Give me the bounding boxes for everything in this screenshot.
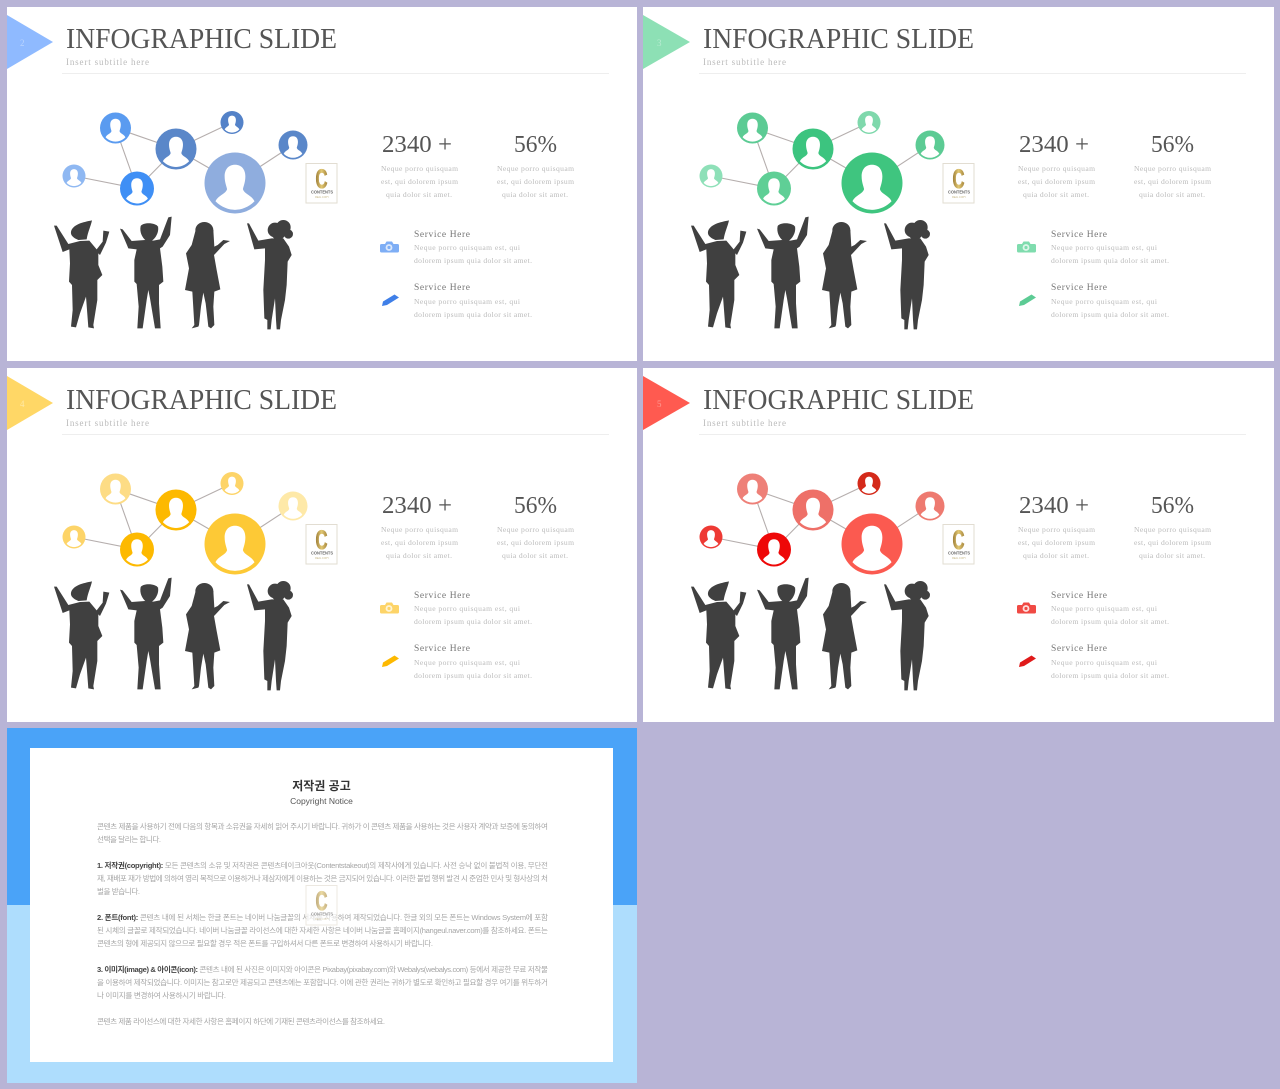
stat: 56%: est, qui dolorem ipsum <box>497 538 574 547</box>
stat: 2340 +: quia dolor sit amet. <box>1023 551 1089 560</box>
icon: camera <box>1017 602 1036 614</box>
panel: green slide <box>643 7 1274 361</box>
stat: 2340 +: Neque porro quisquam <box>381 525 458 534</box>
service block 1: Neque porro quisquam est, qui <box>1051 604 1157 613</box>
copyright intro text: 선택을 달리는 합니다. <box>97 834 161 844</box>
logo badge <box>306 524 337 564</box>
icon: yellow number triangle <box>7 376 53 430</box>
stat: 2340 +: est, qui dolorem ipsum <box>1018 538 1095 547</box>
icon: pencil <box>382 294 399 306</box>
subtitle: Insert subtitle here <box>66 57 149 67</box>
stat: 2340 +: est, qui dolorem ipsum <box>1018 177 1095 186</box>
icon: yellow number triangle: 4 <box>20 399 25 409</box>
stat: 56%: 56% <box>1151 132 1194 158</box>
stat: 56%: 56% <box>514 493 557 519</box>
stat: 2340 +: 2340 + <box>1019 493 1089 519</box>
service block 1: Service Here <box>1051 230 1107 240</box>
logo badge <box>943 524 974 564</box>
people silhouettes <box>691 217 930 329</box>
section 1: copyright: 재, 재배포 재가 방법에 의하여 영리 목적으로 이용하거나 제삼자에게 이용하는 것은 금지되어 있습니다. 이러한 불법 행위 발견 시 준엄한 민사 및 형사상의 처 <box>97 873 548 883</box>
stat: 56%: Neque porro quisquam <box>1134 525 1211 534</box>
icon: green number triangle <box>643 15 690 69</box>
service block 1: dolorem ipsum quia dolor sit amet. <box>414 617 532 626</box>
service block 2: dolorem ipsum quia dolor sit amet. <box>414 671 532 680</box>
stat: 2340 +: Neque porro quisquam <box>1018 525 1095 534</box>
panel: blue slide <box>7 7 637 361</box>
title: INFOGRAPHIC SLIDE <box>703 24 974 55</box>
title: INFOGRAPHIC SLIDE <box>66 385 337 416</box>
panel: red slide <box>643 368 1274 722</box>
stat: 2340 +: Neque porro quisquam <box>381 164 458 173</box>
network of user avatars <box>62 472 308 574</box>
icon: blue number triangle <box>7 15 53 69</box>
stat: 56%: quia dolor sit amet. <box>502 190 568 199</box>
icon: red number triangle <box>643 376 690 430</box>
service block 2: dolorem ipsum quia dolor sit amet. <box>1051 310 1169 319</box>
service block 1 <box>1051 591 1169 626</box>
section 3: image and icon <box>97 964 548 1000</box>
stat: 56%: quia dolor sit amet. <box>502 551 568 560</box>
section 3: image and icon: 나 이미지를 변경하여 사용하시기 바랍니다. <box>97 990 226 1000</box>
service block 1: Neque porro quisquam est, qui <box>1051 243 1157 252</box>
subtitle: Insert subtitle here <box>703 418 786 428</box>
service block 2: Service Here <box>414 283 470 293</box>
stat: 2340 + <box>1018 132 1095 199</box>
stat: 2340 +: Neque porro quisquam <box>1018 164 1095 173</box>
stat: 2340 +: est, qui dolorem ipsum <box>381 538 458 547</box>
service block 1: dolorem ipsum quia dolor sit amet. <box>1051 256 1169 265</box>
title: INFOGRAPHIC SLIDE <box>703 385 974 416</box>
stat: 2340 +: est, qui dolorem ipsum <box>381 177 458 186</box>
network of user avatars <box>62 111 308 214</box>
icon: red number triangle: 5 <box>657 399 662 409</box>
service block 1 <box>414 591 532 626</box>
panel: yellow slide <box>7 368 637 722</box>
icon: pencil <box>382 656 399 667</box>
stat: 56%: 56% <box>1151 493 1194 519</box>
people silhouettes <box>691 578 930 690</box>
logo badge <box>306 886 337 925</box>
service block 1: dolorem ipsum quia dolor sit amet. <box>1051 617 1169 626</box>
panel: copyright notice <box>7 728 637 1083</box>
network of user avatars <box>700 111 944 214</box>
logo badge <box>306 164 337 203</box>
subtitle: Insert subtitle here <box>703 57 786 67</box>
stat: 56% <box>497 132 574 199</box>
stat: 2340 + <box>381 132 458 199</box>
copyright heading: Copyright Notice <box>290 796 353 806</box>
stat: 2340 +: quia dolor sit amet. <box>1023 190 1089 199</box>
section 3: image and icon: 을 이용하여 제작되었습니다. 이미지는 참고로만 제공되고 콘텐츠에는 포함합니다. 이에 관한 권리는 귀하가 별도로 확인하고 필요할 경우 여기를 위두하거 <box>97 977 548 987</box>
copyright intro text: 콘텐츠 제품을 사용하기 전에 다음의 항목과 소유권을 자세히 읽어 주시기 바랍니다. 귀하가 이 콘텐츠 제품을 사용하는 것은 사용자 계약과 보증에 동의하여 <box>97 821 548 831</box>
network of user avatars <box>700 472 944 574</box>
stat: 56%: 56% <box>514 132 557 158</box>
section 1: copyright: 1. 저작권(copyright): 모든 콘텐츠의 소유 및 저작권은 콘텐츠테이크아웃(Contentstakeout)의 제작사에게 있습니다. 사전 승낙 없이 불법적 이용, 무단전 <box>97 860 548 870</box>
icon: pencil <box>1019 656 1036 667</box>
section 2: font: 2. 폰트(font): 콘텐츠 내에 된 서체는 한글 폰트는 네이버 나눔글꼴의 서체를 사용하여 제작되었습니다. 한글 외의 모든 폰트는 Windows System에 포함 <box>97 912 548 922</box>
service block 2: Service Here <box>1051 644 1107 654</box>
service block 2: Service Here <box>1051 283 1107 293</box>
copyright heading <box>290 778 353 806</box>
stat: 56%: est, qui dolorem ipsum <box>1134 177 1211 186</box>
service block 2: Neque porro quisquam est, qui <box>1051 658 1157 667</box>
section 1: copyright <box>97 860 548 896</box>
stat: 56%: Neque porro quisquam <box>497 164 574 173</box>
icon: camera <box>380 602 399 614</box>
stat: 56%: Neque porro quisquam <box>1134 164 1211 173</box>
service block 1: Service Here <box>414 591 470 601</box>
closing note: 콘텐츠 제품 라이선스에 대한 자세한 사항은 홈페이지 하단에 기재된 콘텐츠라이선스를 참조하세요. <box>97 1016 385 1026</box>
service block 2: dolorem ipsum quia dolor sit amet. <box>1051 671 1169 680</box>
section 1: copyright: 벌을 받습니다. <box>97 886 140 896</box>
logo badge <box>943 164 974 203</box>
stat: 56% <box>1134 493 1211 560</box>
stat: 56%: Neque porro quisquam <box>497 525 574 534</box>
stat: 2340 + <box>1018 493 1095 560</box>
people silhouettes <box>54 578 293 690</box>
stat: 2340 +: quia dolor sit amet. <box>386 551 452 560</box>
service block 2: Neque porro quisquam est, qui <box>414 297 520 306</box>
icon: pencil <box>1019 294 1036 306</box>
service block 1 <box>1051 230 1169 265</box>
service block 1: Neque porro quisquam est, qui <box>414 604 520 613</box>
subtitle: Insert subtitle here <box>66 418 149 428</box>
icon: green number triangle: 3 <box>657 38 662 48</box>
people silhouettes <box>54 217 293 329</box>
section 2: font: 콘텐츠의 형에 제공되지 않으므로 필요할 경우 적은 폰트를 구입하셔서 다른 폰트로 변경하여 사용하시기 바랍니다. <box>97 938 433 948</box>
stat: 56%: quia dolor sit amet. <box>1139 190 1205 199</box>
stat: 2340 +: quia dolor sit amet. <box>386 190 452 199</box>
service block 1: Service Here <box>414 230 470 240</box>
stat: 2340 +: 2340 + <box>382 493 452 519</box>
stat: 2340 +: 2340 + <box>1019 132 1089 158</box>
title: INFOGRAPHIC SLIDE <box>66 24 337 55</box>
icon: camera <box>380 242 399 252</box>
copyright heading: 저작권 공고 <box>292 778 351 793</box>
copyright intro text <box>97 821 548 844</box>
service block 2: dolorem ipsum quia dolor sit amet. <box>414 310 532 319</box>
stat: 56% <box>1134 132 1211 199</box>
section 3: image and icon: 3. 이미지(image) & 아이콘(icon): 콘텐츠 내에 된 사진은 이미지와 아이콘은 Pixabay(pixabay.com)와 Webalys(webalys.com) 등에서 제공한 무료 저작물 <box>97 964 548 974</box>
section 2: font <box>97 912 548 948</box>
icon: blue number triangle: 2 <box>20 38 24 48</box>
service block 2 <box>414 644 532 680</box>
stat: 2340 +: 2340 + <box>382 132 452 158</box>
stat: 56%: quia dolor sit amet. <box>1139 551 1205 560</box>
service block 2 <box>1051 283 1169 319</box>
stat: 56% <box>497 493 574 560</box>
icon: camera <box>1017 242 1036 252</box>
service block 1: Service Here <box>1051 591 1107 601</box>
section 2: font: 된 시체의 글꼴로 제작되었습니다. 네이버 나눔글꼴 라이선스에 대한 자세한 사항은 네이버 나눔글꼴 홈페이지(hangeul.naver.com)를 참조하세요. 폰트는 <box>97 925 548 935</box>
service block 2 <box>414 283 532 319</box>
service block 1: Neque porro quisquam est, qui <box>414 243 520 252</box>
service block 2 <box>1051 644 1169 680</box>
service block 2: Neque porro quisquam est, qui <box>414 658 520 667</box>
stat: 56%: est, qui dolorem ipsum <box>1134 538 1211 547</box>
stat: 56%: est, qui dolorem ipsum <box>497 177 574 186</box>
service block 2: Service Here <box>414 644 470 654</box>
service block 2: Neque porro quisquam est, qui <box>1051 297 1157 306</box>
stat: 2340 + <box>381 493 458 560</box>
service block 1 <box>414 230 532 265</box>
service block 1: dolorem ipsum quia dolor sit amet. <box>414 256 532 265</box>
